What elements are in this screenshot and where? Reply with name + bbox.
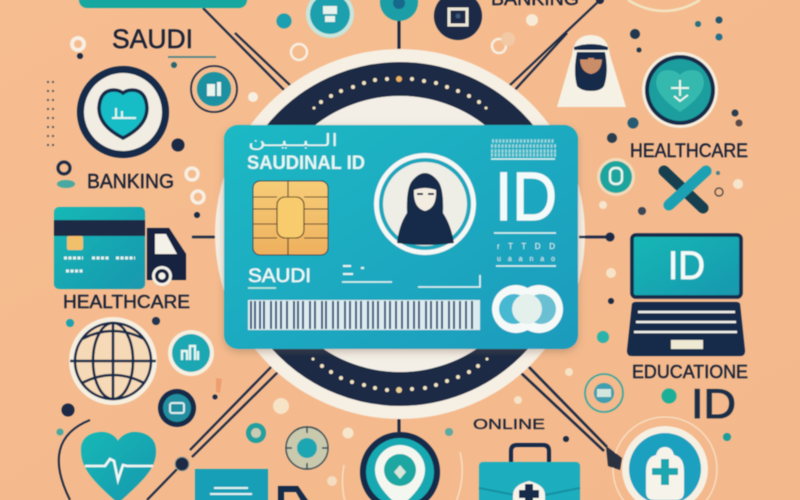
icon: location pin <box>342 432 462 500</box>
card heading: SAUDINAL ID <box>247 153 365 174</box>
decorative dots right <box>579 0 743 242</box>
small marks <box>342 266 480 287</box>
icon: medical circle button <box>613 417 717 500</box>
big ID: ID <box>495 158 557 235</box>
decorative dots lower left <box>56 317 266 500</box>
card heading <box>247 131 365 174</box>
connector lines <box>147 0 612 500</box>
icon: small teal right badge <box>597 158 635 196</box>
icon: heart pulse <box>81 432 156 500</box>
top banner <box>79 0 247 8</box>
label: ID: ID <box>691 380 736 427</box>
icon: heart badge <box>77 66 169 158</box>
barcode <box>248 300 480 330</box>
icon: crossed bandage <box>664 171 706 208</box>
small details right <box>494 233 556 266</box>
bottom center icons <box>273 396 569 486</box>
label: HEALTHCARE right: HEALTHCARE <box>630 141 748 162</box>
chip <box>253 181 328 255</box>
SAUDI label: SAUDI <box>248 266 311 287</box>
label: EDUCATIONE: EDUCATIONE <box>632 362 748 382</box>
ID card <box>224 125 578 349</box>
wedge <box>606 446 622 470</box>
portrait <box>374 153 476 255</box>
card heading: الــبــيــن <box>248 131 338 151</box>
icon: laptop: ID <box>668 244 705 288</box>
icon: small teal badges <box>158 330 214 427</box>
central ring <box>215 49 585 419</box>
heading: SAUDI: SAUDI <box>112 24 193 54</box>
small details right: u a a n a o <box>497 256 555 263</box>
label: BANKING: BANKING <box>87 171 174 193</box>
icon: credit card truck <box>54 207 186 289</box>
icon: heart badge right <box>642 52 718 128</box>
icon: globe <box>69 317 157 405</box>
icon: bottom truck cab <box>278 486 312 500</box>
decorative dots lower right <box>565 268 731 441</box>
top-right pattern <box>491 141 556 159</box>
icon: laptop <box>627 235 745 356</box>
icon: bottom left document <box>195 469 268 500</box>
node <box>175 457 189 471</box>
icon: target badge <box>585 374 623 412</box>
icon: medical briefcase <box>479 445 580 500</box>
icon: small teal badge <box>191 66 237 112</box>
icon: woman figure <box>557 35 626 107</box>
decorative dots left <box>48 38 258 218</box>
card logo circles <box>492 285 563 333</box>
small details right: r T T D D <box>497 242 555 251</box>
ring dots <box>312 76 488 393</box>
top center icons <box>276 0 538 60</box>
label: ONLINE: ONLINE <box>473 416 545 433</box>
label: HEALTHCARE left: HEALTHCARE <box>63 292 190 312</box>
